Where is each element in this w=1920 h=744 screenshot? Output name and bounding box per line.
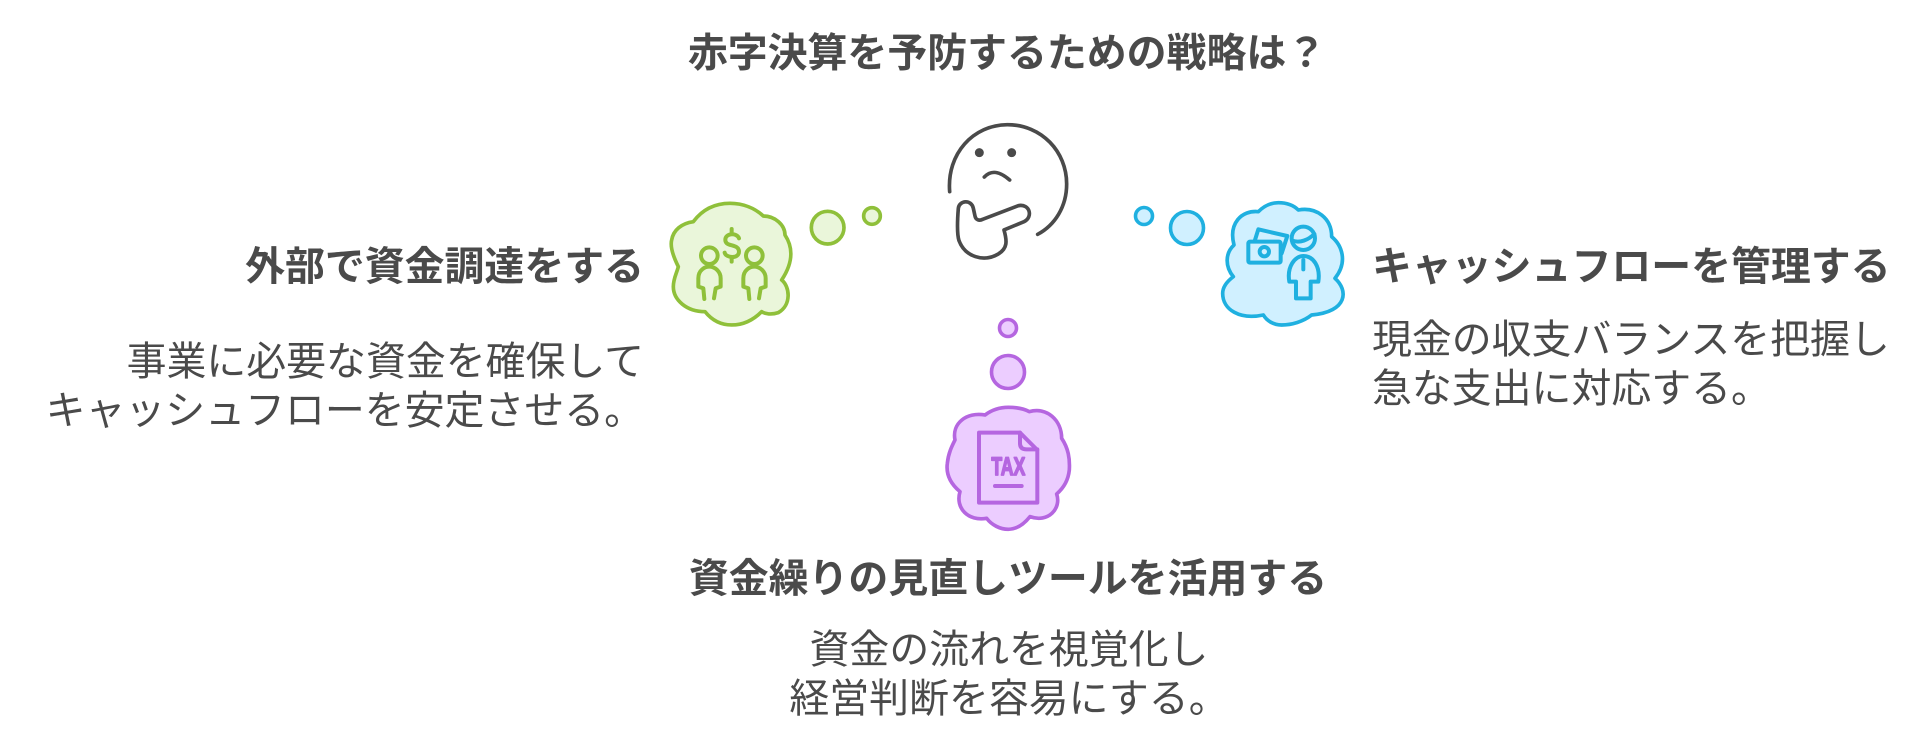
text block: external funding: 事業に必要な資金を確保して <box>127 340 644 384</box>
panel: cash flow management <box>1136 203 1891 411</box>
text block: cash flow review tools <box>789 628 1229 721</box>
text block: external funding <box>46 340 644 433</box>
text block: cash flow management: 現金の収支バランスを把握し <box>1372 318 1890 362</box>
icon: blue bubbles and cloud <box>1136 203 1343 325</box>
text block: cash flow review tools: 資金の流れを視覚化し <box>810 628 1208 672</box>
icon: purple bubbles and cloud <box>947 320 1069 529</box>
text block: cash flow management: 急な支出に対応する。 <box>1372 367 1771 411</box>
icon: thinking face <box>949 125 1067 258</box>
icon: green bubbles and cloud <box>671 203 880 325</box>
heading: external funding: 外部で資金調達をする <box>245 245 644 289</box>
title: 赤字決算を予防するための戦略は？ <box>688 32 1326 76</box>
panel: external funding <box>46 203 880 433</box>
heading: cash flow management: キャッシュフローを管理する <box>1372 245 1891 289</box>
icon: purple bubbles and cloud: TAX <box>991 453 1025 481</box>
panel: cash flow review tools <box>689 320 1327 721</box>
text block: external funding: キャッシュフローを安定させる。 <box>46 389 644 433</box>
text block: cash flow review tools: 経営判断を容易にする。 <box>789 677 1229 721</box>
text block: cash flow management <box>1372 318 1890 411</box>
heading: cash flow review tools: 資金繰りの見直しツールを活用する <box>689 557 1327 601</box>
